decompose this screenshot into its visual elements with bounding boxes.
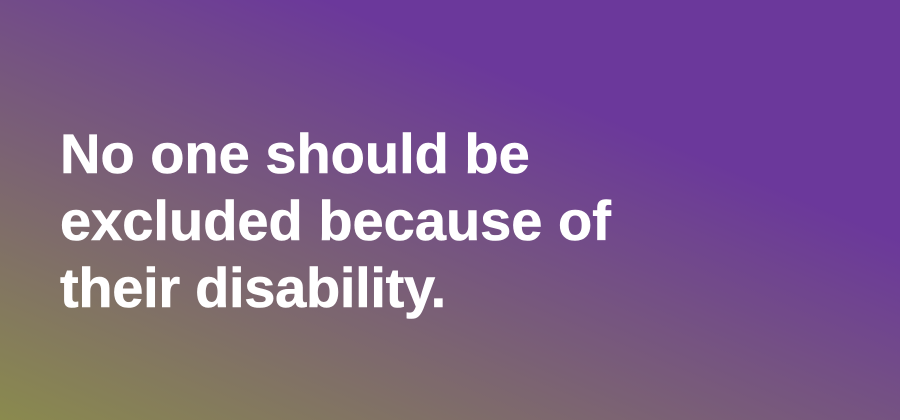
heading: statement: their disability. [60, 256, 446, 319]
heading: statement: No one should be [60, 122, 530, 185]
heading: statement: excluded because of [60, 189, 611, 252]
heading: statement [60, 122, 612, 319]
